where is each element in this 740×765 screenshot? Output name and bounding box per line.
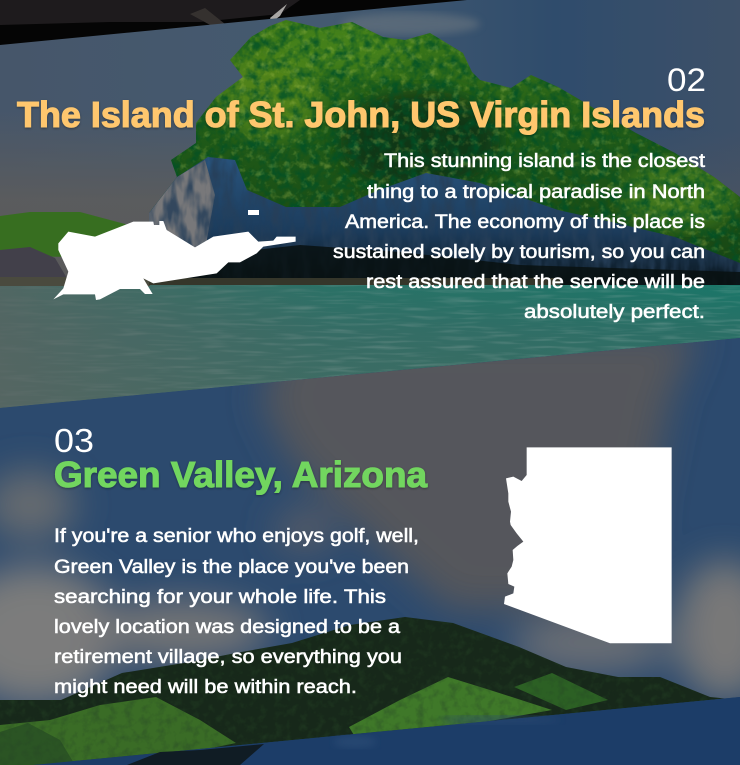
text block: St. John description: thing to a tropical paradise in North: [367, 182, 705, 203]
green hills: [0, 610, 740, 765]
heading: The Island of St. John: The Island of St. John, US Virgin Islands: [17, 94, 705, 135]
text block: Green Valley description: retirement village, so everything you: [54, 647, 402, 668]
left islet: [0, 212, 160, 286]
text block: St. John description: [333, 151, 706, 323]
text block: Green Valley description: lovely location was designed to be a: [54, 617, 400, 638]
island foliage: [150, 20, 740, 263]
sea: [0, 285, 740, 420]
text block: Green Valley description: searching for your whole life. This: [54, 587, 386, 608]
clouds: [0, 330, 740, 705]
heading: Green Valley, Arizona: Green Valley, Arizona: [54, 454, 428, 495]
text block: St. John description: America. The economy of this place is: [345, 212, 705, 233]
text block: Green Valley description: Green Valley is the place you've been: [54, 557, 409, 578]
text block: Green Valley description: If you're a senior who enjoys golf, well,: [54, 526, 419, 547]
text block: St. John description: sustained solely by tourism, so you can: [333, 242, 705, 263]
section number 02: 02: [667, 62, 706, 98]
section number 03: 03: [54, 422, 94, 459]
section 2 photo background: island: [0, 0, 740, 420]
text block: St. John description: This stunning island is the closest: [384, 151, 706, 172]
text block: St. John description: rest assured that the service will be: [366, 272, 705, 293]
map: Arizona state: [504, 447, 672, 643]
text block: Green Valley description: [54, 526, 419, 698]
text block: Green Valley description: might need will be within reach.: [54, 677, 357, 698]
text block: St. John description: absolutely perfect.: [524, 302, 705, 323]
bottom navy band with palm: [33, 697, 740, 765]
top mountain band: [0, 0, 740, 60]
island rock face: [140, 150, 740, 285]
section 3 photo background: clouds and hills: [0, 330, 740, 765]
map: St. John island: [53, 210, 296, 300]
